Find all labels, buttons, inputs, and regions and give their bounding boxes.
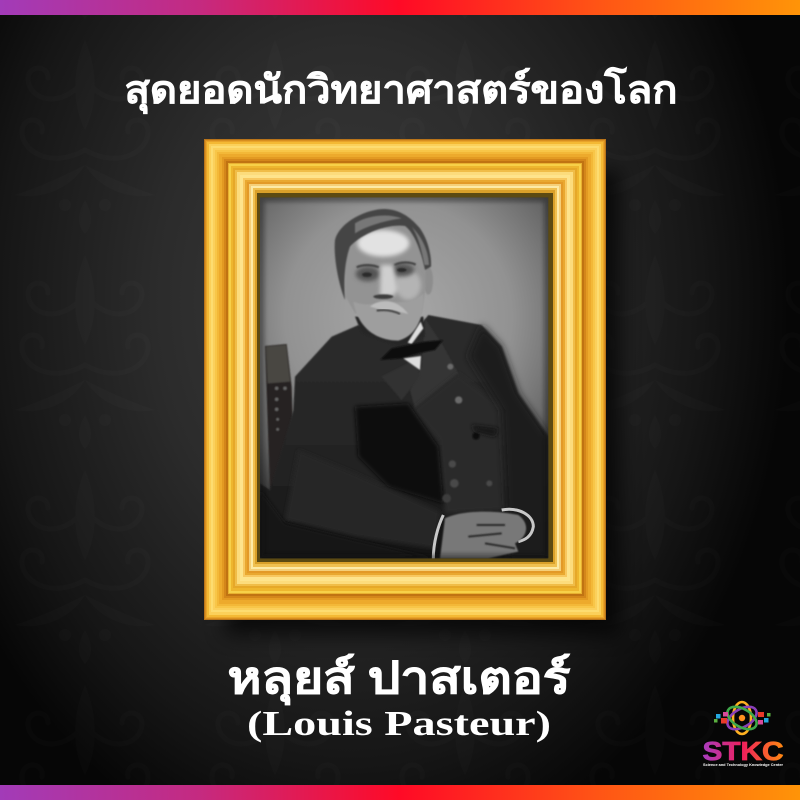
bow tie bbox=[380, 340, 443, 360]
eyes and brows bbox=[357, 262, 416, 277]
shirt front bbox=[403, 356, 421, 370]
neck shadow bbox=[354, 316, 425, 341]
top gradient bar bbox=[0, 0, 800, 15]
chair back bbox=[265, 344, 295, 490]
forehead highlight bbox=[357, 230, 409, 257]
title: สุดยอดนักวิทยาศาสตร์ของโลก bbox=[124, 67, 678, 114]
portrait photo of Louis Pasteur bbox=[260, 197, 548, 558]
finger lines bbox=[468, 525, 515, 548]
nose bbox=[380, 265, 398, 296]
coat lapel bbox=[410, 318, 458, 408]
logo atom icon bbox=[724, 702, 760, 734]
shirt cuffs bbox=[433, 509, 533, 558]
coat front panel bbox=[442, 445, 504, 512]
eye sockets bbox=[356, 264, 414, 281]
sleeve bbox=[287, 486, 438, 548]
grey hair streak bbox=[355, 216, 429, 265]
logo coloured dots bbox=[714, 712, 770, 724]
waistcoat lapel bbox=[384, 370, 418, 400]
logo wordmark: STKC bbox=[702, 736, 784, 766]
bottom gradient bar bbox=[0, 785, 800, 800]
ear bbox=[426, 268, 433, 294]
coat buttons bbox=[442, 364, 492, 503]
photo vignette bbox=[260, 197, 548, 558]
photo backdrop bbox=[260, 197, 548, 558]
right cheek light bbox=[396, 270, 421, 300]
scientist name in Thai: หลุยส์ ปาสเตอร์ bbox=[228, 653, 571, 706]
beard bbox=[353, 293, 424, 341]
coat pocket shadow bbox=[472, 425, 498, 437]
STKC logo bbox=[702, 702, 784, 767]
nose shadow bbox=[373, 294, 393, 299]
mouth bbox=[377, 310, 400, 314]
frame shadow bbox=[225, 170, 620, 635]
face bbox=[346, 251, 424, 312]
gold picture frame bbox=[204, 139, 606, 620]
scientist name in English: (Louis Pasteur) bbox=[247, 704, 551, 743]
hair bbox=[335, 209, 431, 300]
coat shoulder shading bbox=[470, 322, 548, 458]
coat bbox=[260, 315, 548, 558]
collar bbox=[408, 322, 423, 344]
lap shadow bbox=[268, 499, 284, 520]
logo caption: Science and Technology Knowledge Center bbox=[703, 762, 783, 767]
moustache bbox=[370, 301, 408, 314]
dark vest bbox=[355, 403, 443, 503]
clasped hands bbox=[440, 512, 526, 558]
